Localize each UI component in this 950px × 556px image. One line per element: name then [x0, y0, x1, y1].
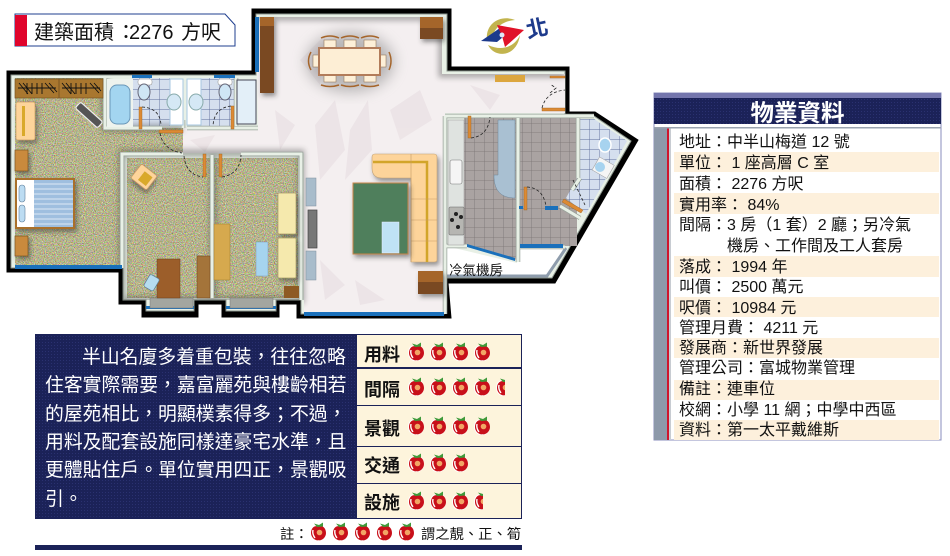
rating: materials — [357, 335, 521, 367]
property details: 管理月費： 4211 元 — [679, 318, 818, 337]
title tag — [15, 14, 235, 46]
north label: 北 — [524, 14, 550, 43]
floor: carpet bedroom three — [214, 158, 298, 298]
property details: 校網：小學 11 網；中學中西區 — [679, 401, 897, 419]
bedroom three bench — [256, 242, 268, 276]
property details: 實用率： 84% — [679, 195, 779, 214]
floor: marble living and dining room — [183, 17, 565, 312]
panel heading: 物業資料 — [750, 100, 844, 126]
rating: view: 景觀 — [364, 419, 400, 439]
wall cast shadow — [15, 17, 565, 300]
rating: view — [357, 406, 521, 446]
panel heading — [654, 98, 941, 126]
rating footnote — [280, 522, 521, 543]
service bathroom fixtures — [592, 138, 614, 178]
rating: transport — [357, 447, 521, 483]
floor: carpet bedroom two — [127, 158, 211, 298]
floor: bathroom tiles — [132, 78, 170, 126]
review text panel — [35, 334, 357, 519]
property details: 地址：中半山梅道 12 號 — [679, 133, 850, 151]
grey window bays — [150, 298, 273, 308]
shower — [237, 80, 256, 124]
utility counter — [494, 120, 515, 198]
bedroom three desk — [214, 224, 230, 280]
blue windows — [15, 17, 563, 316]
bedroom two desk — [157, 259, 180, 298]
review text panel: 用料及配套設施同樣達豪宅水準，且 — [45, 431, 346, 452]
floor plan — [7, 9, 638, 318]
wall lining — [11, 14, 631, 314]
north compass — [481, 14, 550, 54]
toilet right — [218, 79, 232, 100]
rating: facilities — [357, 484, 521, 518]
master bedroom wardrobe — [15, 79, 103, 98]
rating: facilities: 設施 — [364, 493, 400, 513]
review text panel: 半山名廈多着重包裝，往往忽略 — [82, 346, 346, 367]
dining table and chairs — [306, 32, 394, 92]
alternating row stripes — [674, 152, 939, 440]
wall shelf — [495, 75, 525, 82]
property details: 管理公司：富城物業管理 — [679, 358, 855, 377]
orange doors — [139, 76, 583, 213]
property info panel — [654, 93, 941, 440]
property details: 單位： 1 座高層 C 室 — [679, 154, 829, 172]
bottom bar — [35, 545, 522, 550]
bed — [15, 178, 75, 229]
toilet left — [138, 79, 152, 100]
bedroom two chair — [143, 274, 160, 292]
title tag: 方呎 — [181, 21, 221, 44]
basin counter left — [167, 79, 183, 125]
rating: layout: 間隔 — [364, 380, 400, 400]
L-shaped sofa — [372, 154, 437, 262]
rating: layout — [357, 369, 521, 405]
floor: service bathroom tile — [566, 119, 627, 214]
property details: 資料：第一太平戴維斯 — [679, 420, 839, 439]
property details: 落成： 1994 年 — [679, 258, 788, 276]
air-conditioning room — [446, 246, 566, 278]
bedroom three storage — [284, 286, 299, 298]
property details: 機房、工作間及工人套房 — [727, 237, 903, 255]
title tag: 2276 — [129, 22, 174, 44]
floor: utility room tile — [519, 118, 577, 246]
property details: 叫價： 2500 萬元 — [679, 278, 804, 296]
rating footnote: 註： — [280, 526, 309, 543]
TV unit — [306, 178, 317, 280]
door swing arcs — [142, 84, 585, 206]
rating: materials: 用料 — [364, 345, 400, 365]
bathtub — [107, 79, 133, 127]
master bedroom sofa — [16, 102, 35, 140]
ratings panel — [356, 334, 522, 519]
floor: carpet master bedroom — [15, 78, 183, 266]
property details: 呎價： 10984 元 — [679, 299, 796, 317]
review text panel: 引。 — [45, 488, 83, 509]
bedroom three sofas — [278, 193, 296, 278]
marble mottling — [190, 35, 500, 305]
rating: transport: 交通 — [364, 455, 400, 476]
review text panel: 的屋苑相比，明顯樸素得多；不過， — [45, 403, 346, 424]
nightstands — [15, 150, 28, 256]
living room cabinets — [260, 17, 443, 294]
title tag: ： — [116, 22, 136, 44]
title tag: 建築面積 — [34, 21, 114, 44]
kitchen counter — [448, 120, 464, 245]
review text panel: 住客實際需要，嘉富麗苑與樓齡相若 — [45, 374, 346, 395]
armchair — [131, 164, 157, 190]
rating footnote: 謂之靚、正、筍 — [421, 525, 521, 543]
floor: kitchen tile — [464, 118, 517, 260]
property details: 面積： 2276 方呎 — [679, 175, 804, 193]
basin counter right — [187, 79, 203, 125]
side strip — [654, 127, 941, 440]
property details: 間隔：3 房（1 套）2 廳；另冷氣 — [679, 215, 911, 234]
interior walls — [105, 78, 594, 314]
property details: 發展商：新世界發展 — [679, 339, 823, 357]
bedroom two cabinet — [197, 256, 210, 298]
radiator bench — [75, 102, 103, 128]
green rug — [353, 183, 408, 254]
review text panel: 更體貼住戶。單位實用四正，景觀吸 — [45, 459, 347, 480]
property details: 備註：連車位 — [679, 380, 775, 398]
outer wall — [7, 9, 638, 318]
room label: 冷氣機房 — [449, 263, 503, 278]
coffee table — [382, 222, 399, 253]
